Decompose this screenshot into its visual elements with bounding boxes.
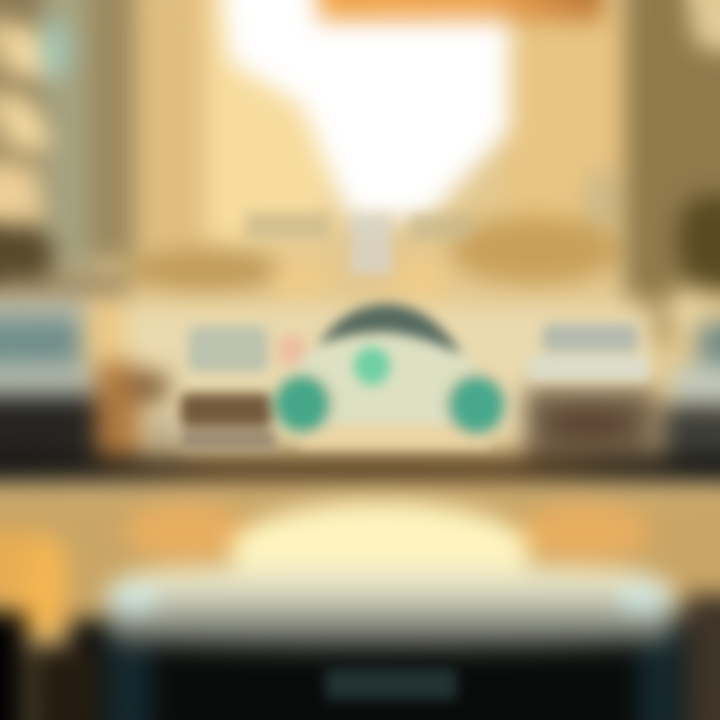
car: far left xyxy=(0,300,178,480)
car: right xyxy=(528,324,648,380)
car: centre, white with green accents xyxy=(269,304,510,447)
car: centre left xyxy=(180,326,306,450)
faint sign xyxy=(245,212,472,274)
detail layer: sharper small features xyxy=(180,212,648,700)
central console: faint instrument glow xyxy=(325,668,457,700)
buildings: right side xyxy=(505,0,720,295)
buildings: left side xyxy=(0,0,330,285)
sunlight glare xyxy=(222,0,510,218)
orange overhang at top xyxy=(318,0,603,20)
street light band behind cars xyxy=(125,305,655,440)
steering wheel top: pale highlight xyxy=(104,563,678,652)
car: right body tones xyxy=(525,388,655,454)
dashboard: golden reflection xyxy=(0,492,720,637)
street haze and golden reflections xyxy=(0,216,676,348)
dark interior: surround and lower panel xyxy=(0,595,720,720)
car: far right xyxy=(662,288,720,480)
dark horizon band underlay xyxy=(0,456,720,482)
